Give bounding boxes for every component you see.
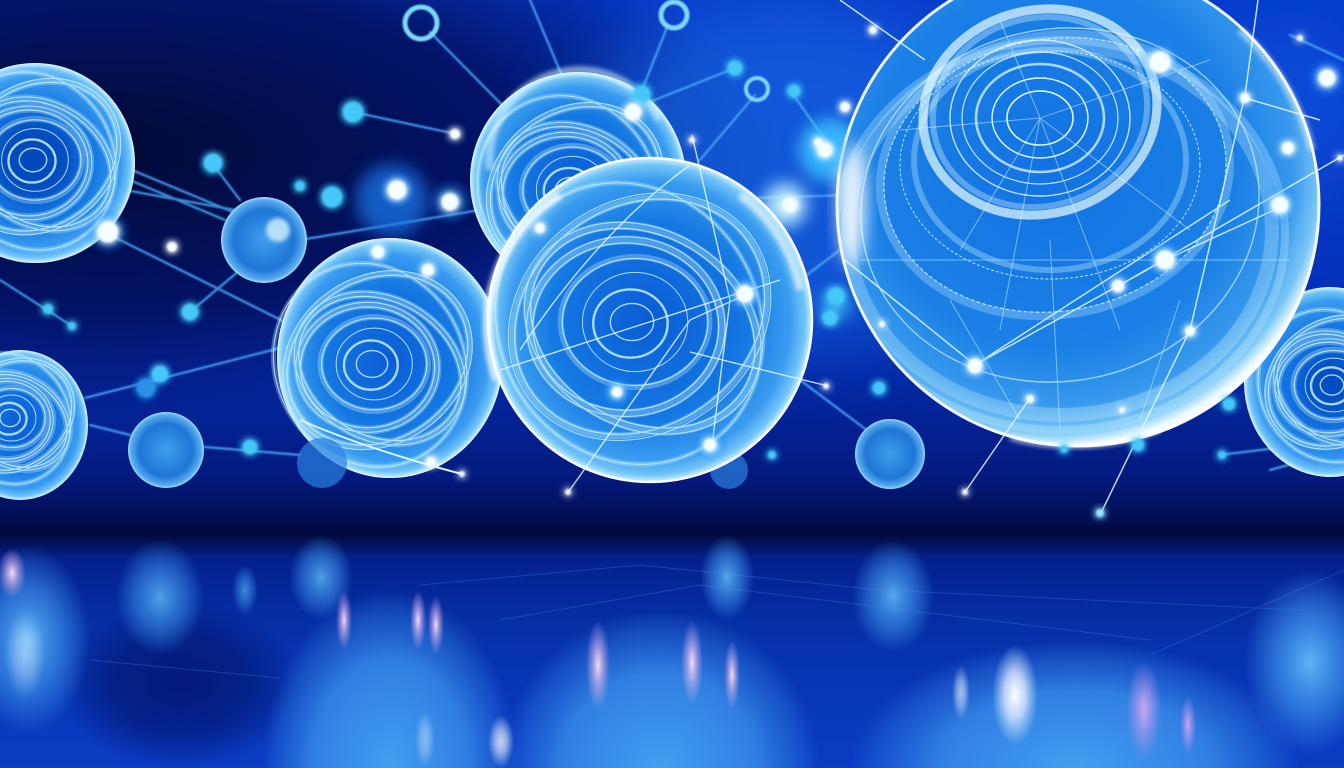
large sphere inner spiral	[900, 0, 1180, 241]
floor grid lines	[90, 565, 1344, 678]
sphere: back top	[443, 62, 697, 320]
large sphere outer rings	[828, 0, 1292, 430]
large sphere network lines	[840, 0, 1344, 515]
pink light streaks	[0, 548, 1196, 768]
sphere: far left top	[0, 41, 151, 281]
reflective floor	[0, 534, 1344, 768]
sphere: center	[444, 134, 828, 513]
bright white nodes	[98, 26, 1343, 517]
small sphere 4	[297, 438, 347, 488]
sphere: far left bottom	[0, 330, 97, 507]
small sphere highlight	[266, 218, 290, 242]
floor reflections	[0, 535, 1344, 768]
large sphere radial grid	[860, 20, 1290, 430]
small sphere 5	[710, 451, 748, 489]
cyan network nodes	[43, 61, 1235, 459]
glow halos	[84, 38, 1344, 463]
back glow blobs	[356, 120, 860, 319]
small spheres	[128, 197, 925, 489]
sphere: right edge	[1230, 283, 1344, 489]
small sphere 3	[855, 419, 925, 489]
small sphere 1	[221, 197, 307, 283]
background wall	[0, 0, 1344, 540]
sphere: large right	[828, 0, 1344, 515]
sphere: left middle	[237, 228, 507, 502]
network connection lines	[0, 0, 1344, 470]
hollow ring nodes	[405, 2, 768, 100]
small sphere 2	[128, 412, 204, 488]
